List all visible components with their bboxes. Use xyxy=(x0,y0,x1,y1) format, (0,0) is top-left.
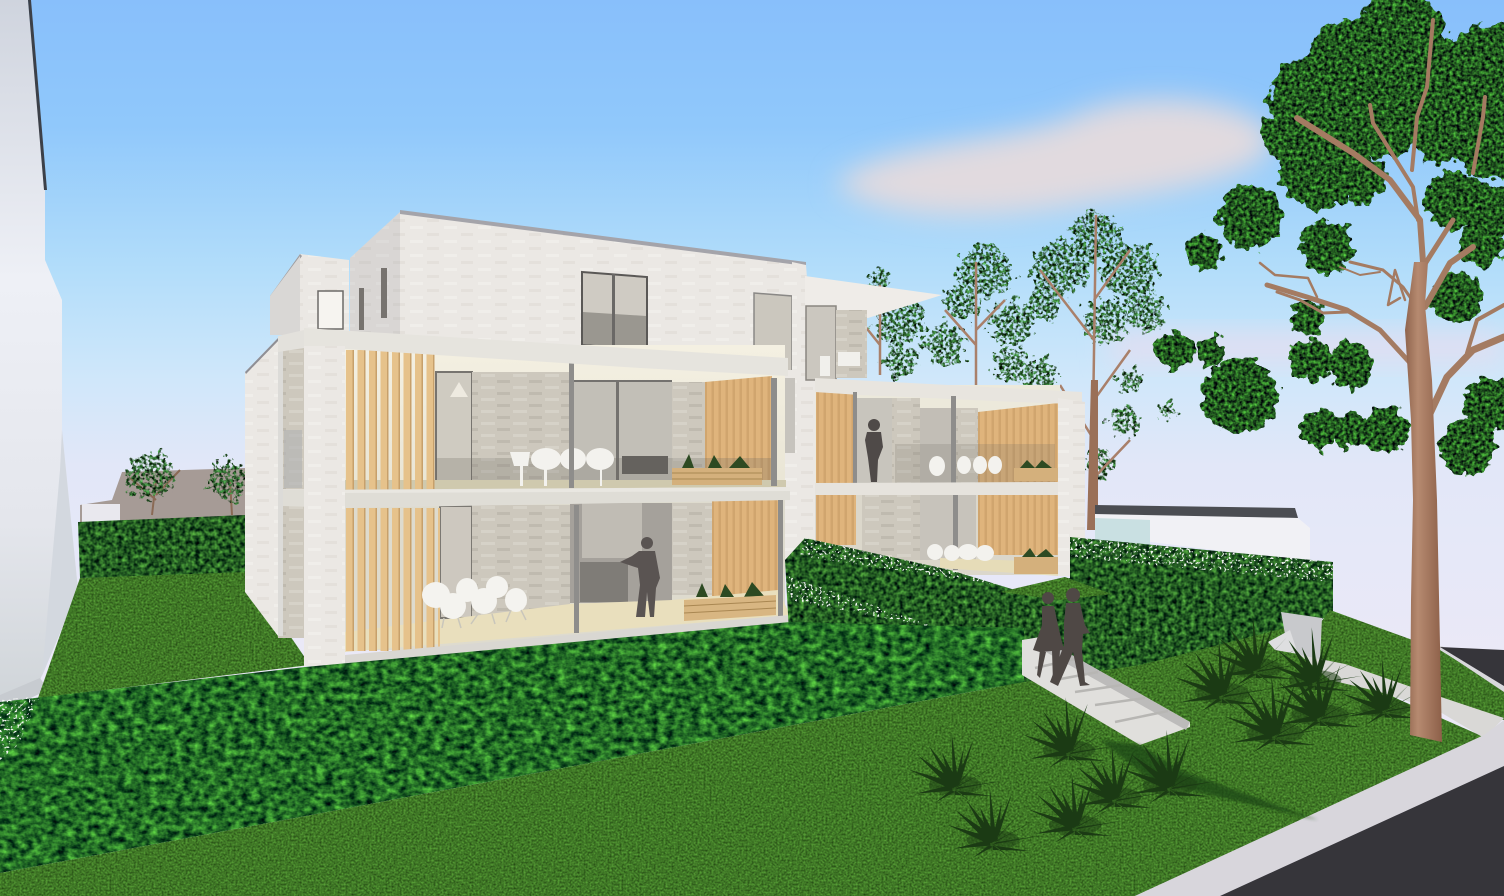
footpath xyxy=(1300,655,1504,738)
upper storey side face xyxy=(350,212,400,338)
small lawn between hedges xyxy=(1000,577,1112,600)
back lawn xyxy=(38,570,310,698)
balcony columns xyxy=(569,362,783,633)
large foreground tree xyxy=(1156,0,1504,742)
wing column and slabs xyxy=(815,378,1082,495)
lower slats xyxy=(345,508,440,651)
wing roof slab xyxy=(805,276,942,318)
right lawn bank xyxy=(1300,610,1504,720)
middle hedge xyxy=(785,538,1290,690)
back hedge xyxy=(78,515,245,578)
main front hedge xyxy=(0,622,1024,873)
right upper window xyxy=(754,293,792,372)
woman on balcony xyxy=(865,419,883,482)
upper planter xyxy=(672,454,762,485)
recessed upper balcony xyxy=(345,345,786,490)
building: main block xyxy=(245,210,815,666)
wing lower bay xyxy=(815,495,1060,576)
lower slab edge xyxy=(304,615,790,666)
couple walking down the stairs xyxy=(1033,588,1090,686)
front brick pier xyxy=(304,346,345,666)
wing upper storey xyxy=(806,306,867,380)
wing planter xyxy=(1014,460,1058,481)
mid slab xyxy=(283,487,790,508)
background trees xyxy=(860,212,1172,530)
wing balcony upper bay xyxy=(815,385,1060,485)
wing chairs xyxy=(929,456,1002,476)
recessed lower unit xyxy=(345,500,790,652)
upper slats xyxy=(345,350,436,490)
distant house and trees behind the hedge xyxy=(80,451,248,525)
upper balcony chairs xyxy=(510,448,614,486)
far-left rear volume xyxy=(270,254,349,335)
road surfaces xyxy=(1220,647,1504,896)
person on terrace xyxy=(620,537,660,617)
small retaining wall xyxy=(1268,612,1322,662)
wing brick pier xyxy=(1058,398,1085,576)
horizon cloud band xyxy=(1110,335,1504,361)
road curb xyxy=(1135,646,1504,896)
tree shadow xyxy=(1100,740,1318,820)
trunk xyxy=(1405,262,1442,742)
left neighbouring building xyxy=(0,0,78,712)
upper storey front face xyxy=(400,210,806,372)
right white pier xyxy=(775,262,815,560)
right hedge xyxy=(1070,537,1333,640)
white house to the right xyxy=(1095,505,1310,562)
cloud xyxy=(835,99,1272,216)
left side wall xyxy=(245,330,306,638)
upper window xyxy=(582,272,647,349)
lower planter xyxy=(684,582,776,621)
ornamental grass plants xyxy=(909,615,1431,858)
lower terrace chairs xyxy=(422,576,527,628)
foliage xyxy=(1156,0,1504,475)
right wing of the building xyxy=(805,276,1085,576)
branches xyxy=(1260,20,1504,420)
stairs xyxy=(1022,637,1190,745)
front lawn xyxy=(0,628,1484,896)
top slab xyxy=(304,328,788,376)
